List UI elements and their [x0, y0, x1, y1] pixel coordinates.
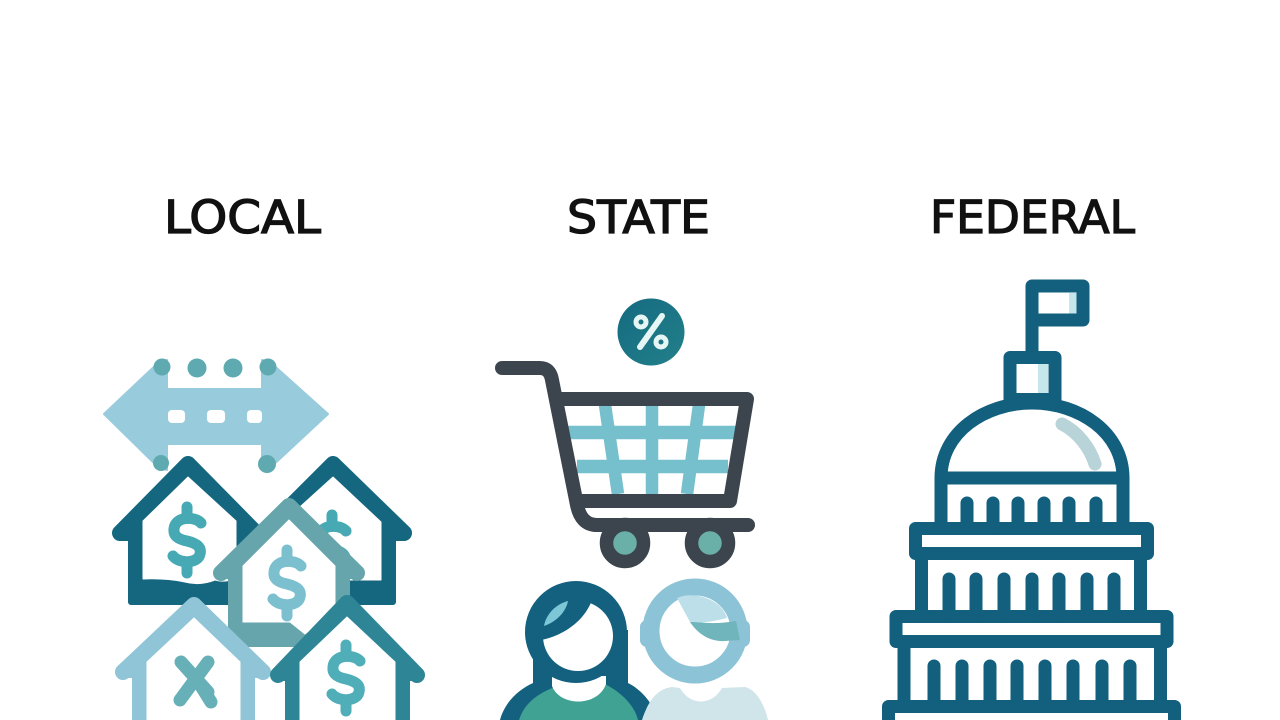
icon: shopping cart	[502, 368, 748, 562]
cart frame	[502, 368, 748, 525]
icon: house with dollar, front right	[278, 603, 417, 720]
icon: house with dollar, back left	[120, 464, 256, 602]
cart mesh	[568, 405, 737, 494]
icon: double-headed arrow with dots	[104, 358, 328, 473]
percent sign	[636, 316, 666, 347]
capitol outlines	[888, 286, 1174, 720]
column heading: FEDERAL: FEDERAL	[930, 191, 1135, 244]
icon: house with dollar, center	[221, 506, 357, 644]
icon: capitol building	[888, 286, 1174, 720]
icon: second person, light	[640, 587, 768, 720]
column heading: LOCAL: LOCAL	[164, 191, 321, 244]
icon: local property taxes	[104, 358, 417, 720]
column heading: STATE: STATE	[567, 191, 710, 244]
capitol highlights	[1038, 293, 1171, 643]
icon: woman	[500, 581, 657, 720]
capitol columns	[934, 503, 1130, 702]
cart wheels	[606, 524, 728, 562]
icon: percent badge	[618, 298, 684, 366]
icon: house with dollar, back right	[270, 464, 404, 602]
icon: house with X	[123, 605, 263, 720]
